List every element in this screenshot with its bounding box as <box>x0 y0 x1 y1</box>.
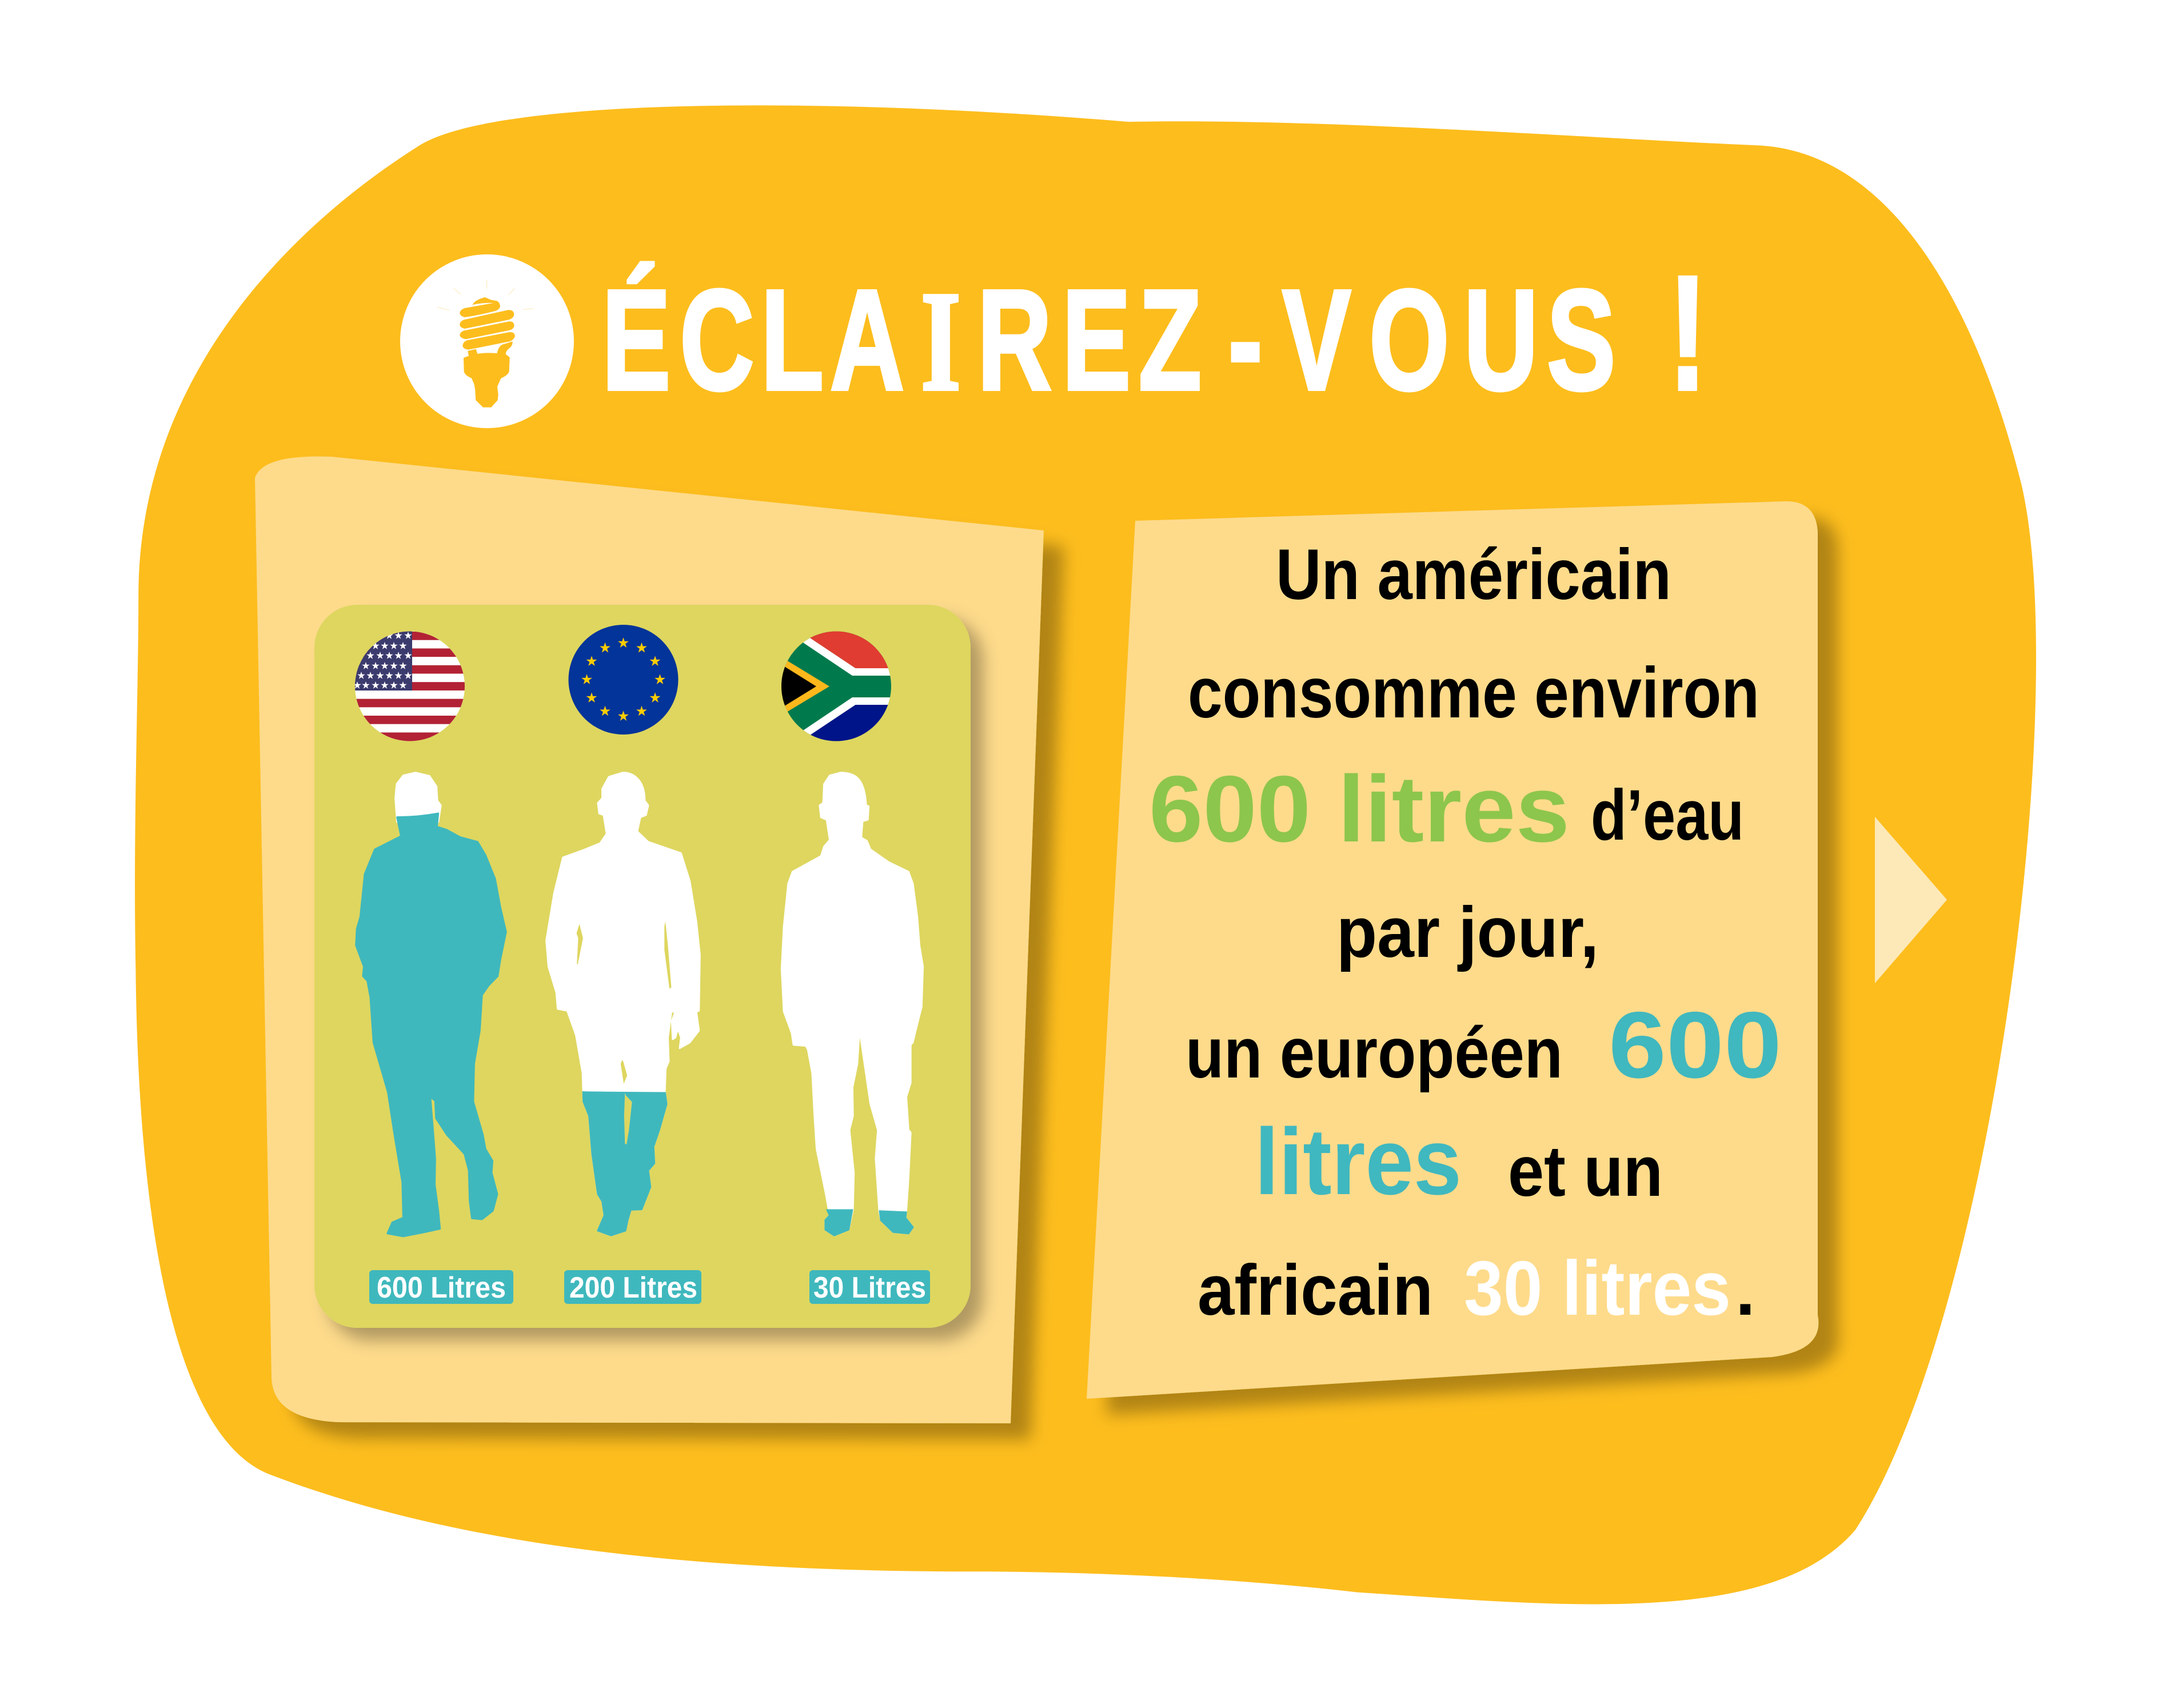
text block: water consumption: par jour, <box>1336 893 1599 972</box>
text block: water consumption: africain <box>1198 1251 1433 1330</box>
text block: water consumption: 600 litres <box>1149 756 1570 861</box>
flag: European Union <box>568 625 678 735</box>
text block: water consumption: litres <box>1255 1109 1462 1214</box>
background blob <box>135 105 2036 1604</box>
arrow: next <box>1875 817 1947 983</box>
panel: left chart paper <box>255 456 1044 1423</box>
text block: water consumption: consomme environ <box>1188 653 1759 733</box>
infographic <box>135 105 2036 1604</box>
figure: American 600 litres <box>356 773 506 1236</box>
figure: European 200 litres <box>546 773 700 1235</box>
label: 200 Litres: 200 Litres <box>569 1271 697 1304</box>
text block: water consumption <box>1149 535 1782 1331</box>
text block: water consumption: Un américain <box>1276 535 1671 614</box>
text block: water consumption: et un <box>1508 1132 1663 1211</box>
label: 600 Litres: 600 Litres <box>377 1271 506 1304</box>
panel: right text note <box>1087 501 1818 1399</box>
text block: water consumption: d’eau <box>1591 776 1744 855</box>
label: 30 Litres: 30 Litres <box>813 1271 926 1304</box>
text block: water consumption: . <box>1735 1251 1755 1330</box>
card: consumption figures <box>314 605 971 1328</box>
flag: South Africa <box>781 631 892 742</box>
text block: water consumption: un européen <box>1186 1013 1563 1093</box>
title text: ÉCLAIREZ-VOUS ! <box>602 242 1707 424</box>
title <box>400 242 1707 428</box>
flag: USA <box>353 631 465 742</box>
text block: water consumption: 600 <box>1609 992 1782 1098</box>
figure: African 30 litres <box>781 773 923 1235</box>
text block: water consumption: 30 litres <box>1464 1245 1731 1331</box>
icon: light bulb <box>400 254 574 428</box>
figures <box>356 773 923 1236</box>
